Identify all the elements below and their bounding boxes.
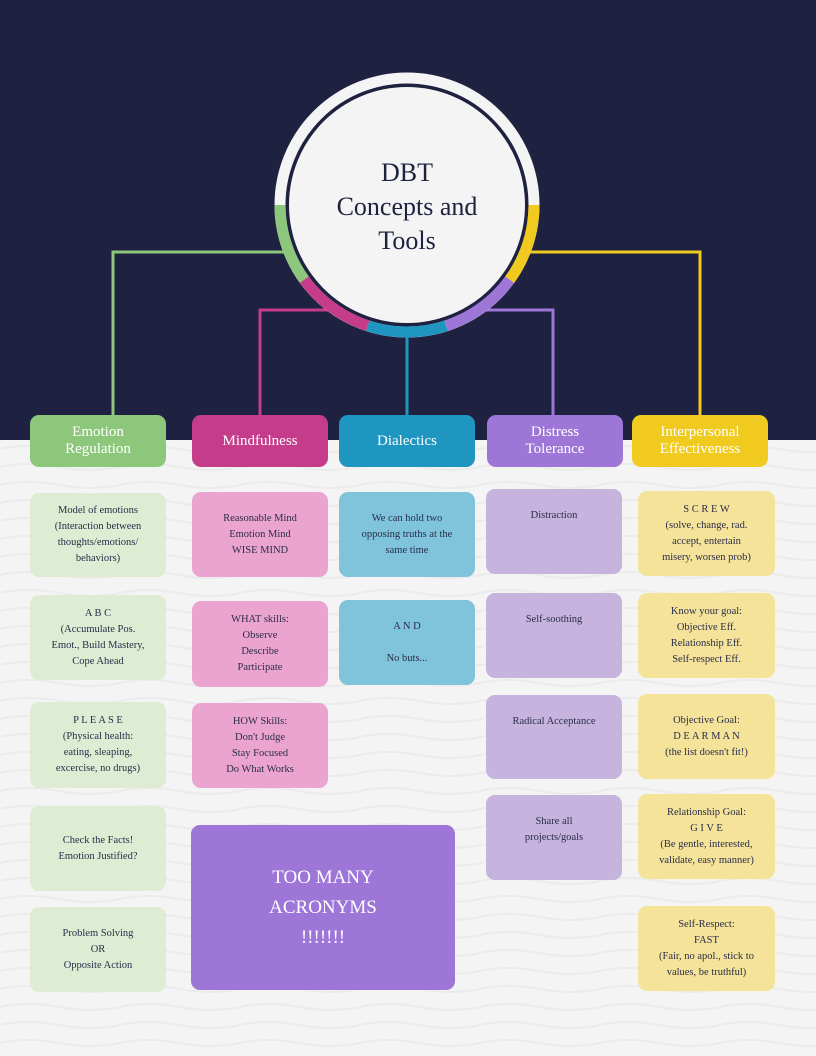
- title: DBT: [381, 158, 433, 187]
- card: DEARMAN: [638, 694, 775, 779]
- card: PLEASE: P L E A S E: [73, 715, 123, 726]
- card: HOW skills: Don't Judge: [235, 732, 285, 742]
- card: ABC: Cope Ahead: [72, 656, 124, 666]
- card: WHAT skills: [192, 601, 328, 687]
- card: GIVE: validate, easy manner): [659, 854, 754, 866]
- card: FAST: values, be truthful): [667, 966, 746, 978]
- card: SCREW: misery, worsen prob): [662, 552, 751, 562]
- card: DEARMAN: (the list doesn't fit!): [665, 746, 748, 758]
- card: radical acceptance: [486, 695, 622, 779]
- card: AND: A N D: [393, 620, 421, 632]
- card: AND: [339, 600, 475, 685]
- card: HOW skills: [192, 703, 328, 788]
- card: model of emotions: (Interaction between: [55, 521, 141, 532]
- card: share all: Share all: [535, 816, 572, 827]
- card: minds: WISE MIND: [232, 544, 288, 556]
- card: DEARMAN: Objective Goal:: [673, 714, 740, 726]
- card: PLEASE: [30, 702, 166, 788]
- card: WHAT skills: Observe: [242, 630, 277, 641]
- card: DEARMAN: D E A R M A N: [673, 730, 740, 742]
- header: Distress Tolerance: Tolerance: [526, 441, 584, 457]
- header: Dialectics: Dialectics: [377, 432, 437, 448]
- header: Emotion Regulation: Emotion: [72, 424, 124, 440]
- card: problem solving: [30, 907, 166, 992]
- card: SCREW: (solve, change, rad.: [666, 520, 747, 530]
- card: distraction: Distraction: [531, 510, 577, 521]
- header: Distress Tolerance: [487, 415, 623, 467]
- title: [337, 158, 478, 255]
- card: check the facts: Check the Facts!: [63, 834, 133, 846]
- card: GIVE: [638, 794, 775, 879]
- card: share all: projects/goals: [525, 832, 583, 843]
- callout: too many acronyms: !!!!!!!: [301, 926, 345, 948]
- card: know your goal: Self-respect Eff.: [672, 654, 741, 664]
- card: HOW skills: Stay Focused: [232, 748, 288, 758]
- card: FAST: Self-Respect:: [678, 918, 735, 930]
- card: ABC: (Accumulate Pos.: [61, 624, 135, 634]
- card: PLEASE: eating, sleaping,: [64, 747, 132, 758]
- card: GIVE: Relationship Goal:: [667, 806, 746, 818]
- header: Mindfulness: [192, 415, 328, 467]
- card: FAST: FAST: [694, 934, 719, 946]
- card: minds: Emotion Mind: [229, 528, 291, 540]
- header: Distress Tolerance: Distress: [531, 424, 579, 440]
- card: problem solving: OR: [91, 944, 105, 954]
- header: Interpersonal Effectiveness: [632, 415, 768, 467]
- callout: too many acronyms: TOO MANY: [272, 866, 374, 888]
- card: check the facts: [30, 806, 166, 891]
- card: WHAT skills: Describe: [241, 646, 279, 657]
- card: model of emotions: behaviors): [76, 553, 120, 564]
- card: check the facts: Emotion Justified?: [58, 850, 138, 862]
- card: model of emotions: Model of emotions: [58, 505, 138, 516]
- background waves: [0, 445, 816, 1047]
- card: self-soothing: [486, 593, 622, 678]
- card: GIVE: (Be gentle, interested,: [660, 838, 753, 850]
- title: Tools: [378, 226, 436, 255]
- card: problem solving: Problem Solving: [63, 928, 133, 938]
- card: know your goal: Relationship Eff.: [671, 638, 742, 648]
- card: SCREW: [638, 491, 775, 576]
- card: two truths: opposing truths at the: [362, 528, 452, 540]
- connectors and central circle: [112, 72, 702, 415]
- header: Dialectics: [339, 415, 475, 467]
- card: model of emotions: thoughts/emotions/: [58, 537, 138, 548]
- card: HOW skills: HOW Skills:: [233, 716, 287, 726]
- callout: too many acronyms: [191, 825, 455, 990]
- header: Emotion Regulation: Regulation: [65, 441, 131, 457]
- header: Interpersonal Effectiveness: Interpersonal: [660, 424, 740, 440]
- card: AND: No buts...: [387, 652, 427, 664]
- card: HOW skills: Do What Works: [226, 764, 294, 774]
- card: WHAT skills: WHAT skills:: [231, 614, 289, 625]
- card: ABC: A B C: [85, 608, 111, 618]
- card: self-soothing: Self-soothing: [526, 614, 582, 625]
- card: SCREW: accept, entertain: [672, 536, 741, 546]
- card: model of emotions: [30, 493, 166, 577]
- header: Interpersonal Effectiveness: Effectiveness: [660, 441, 740, 457]
- card: PLEASE: (Physical health:: [63, 731, 133, 742]
- card: GIVE: G I V E: [690, 822, 723, 834]
- card: two truths: [339, 492, 475, 577]
- card: ABC: Emot., Build Mastery,: [52, 640, 144, 650]
- card: know your goal: Know your goal:: [671, 606, 742, 616]
- card: ABC: [30, 595, 166, 680]
- card: know your goal: Objective Eff.: [677, 622, 736, 632]
- card: minds: [192, 492, 328, 577]
- card: two truths: same time: [386, 544, 428, 556]
- card: minds: Reasonable Mind: [223, 512, 297, 524]
- card: SCREW: S C R E W: [683, 504, 730, 514]
- callout: too many acronyms: ACRONYMS: [269, 896, 377, 918]
- card: two truths: We can hold two: [372, 512, 442, 524]
- card: PLEASE: excercise, no drugs): [56, 763, 140, 774]
- card: FAST: (Fair, no apol., stick to: [659, 950, 754, 962]
- card: WHAT skills: Participate: [238, 662, 282, 673]
- title: Concepts and: [337, 192, 477, 221]
- header: Emotion Regulation: [30, 415, 166, 467]
- card: distraction: [486, 489, 622, 574]
- card: know your goal: [638, 593, 775, 678]
- card: FAST: [638, 906, 775, 991]
- header: Mindfulness: Mindfulness: [222, 432, 298, 448]
- card: radical acceptance: Radical Acceptance: [512, 716, 596, 727]
- card: problem solving: Opposite Action: [64, 960, 132, 970]
- card: share all: [486, 795, 622, 880]
